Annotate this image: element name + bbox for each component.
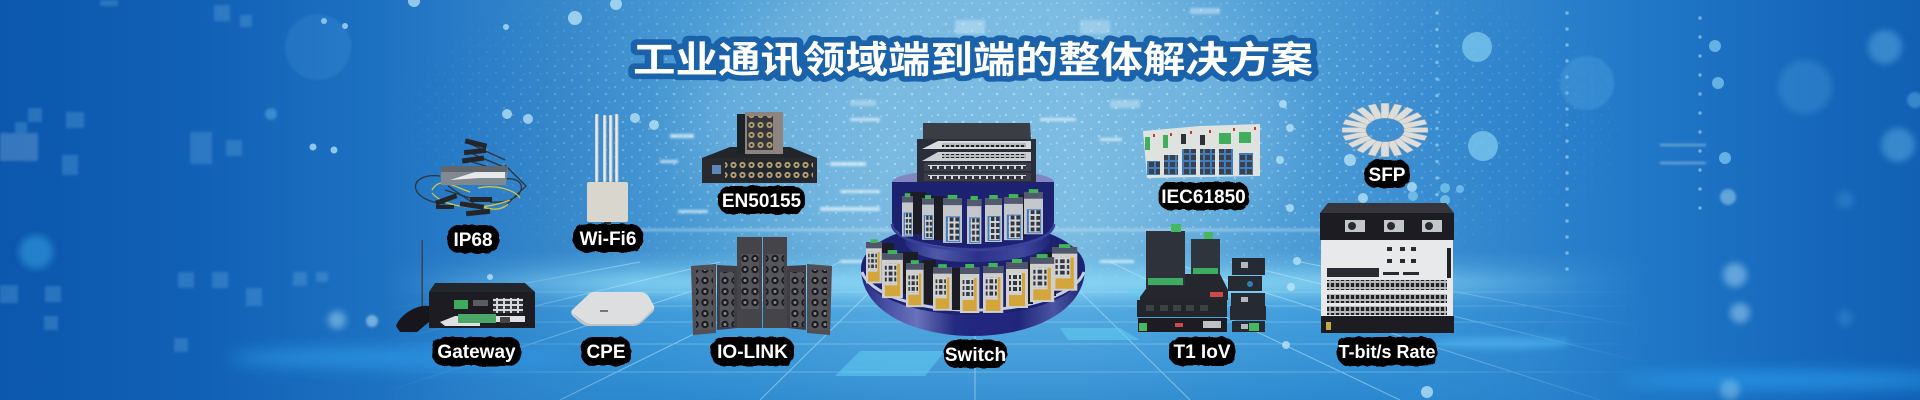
data streaks <box>640 8 1706 263</box>
device: T-bit/s rate chassis <box>1320 203 1454 333</box>
label: IP68 <box>447 225 499 253</box>
floor <box>408 258 1624 400</box>
label: SFP <box>1364 160 1410 188</box>
device: Wi-Fi6 router <box>587 114 628 224</box>
label: Wi-Fi6 <box>573 224 643 252</box>
device: IO-LINK <box>691 237 832 335</box>
rack switches <box>917 123 1036 182</box>
label: T-bit/s Rate <box>1337 337 1437 366</box>
label: IEC61850 <box>1158 182 1249 210</box>
device: SFP ring <box>1342 103 1428 157</box>
label: T1 IoV: T1 IoV <box>1173 342 1231 363</box>
device: IP68 <box>415 138 526 216</box>
label: T-bit/s Rate: T-bit/s Rate <box>1338 342 1436 362</box>
speckle field <box>422 2 1610 270</box>
label: CPE: CPE <box>586 342 626 363</box>
label: CPE <box>581 337 631 366</box>
upper row of switches <box>902 189 1043 244</box>
device: Gateway <box>396 240 535 332</box>
label: Gateway: Gateway <box>437 342 516 363</box>
label: IO-LINK: IO-LINK <box>717 342 788 363</box>
lower disc <box>861 221 1085 336</box>
label: SFP: SFP <box>1369 165 1406 186</box>
device: Switch carousel <box>861 123 1085 336</box>
middle cylinder <box>905 225 1050 262</box>
label: Gateway <box>432 337 521 366</box>
lower row of switches <box>866 239 1077 313</box>
device: IEC61850 <box>1143 124 1260 178</box>
dotted columns <box>1437 13 1700 300</box>
label: T1 IoV <box>1169 337 1235 366</box>
label: EN50155: EN50155 <box>722 191 802 212</box>
label: EN50155 <box>718 186 805 214</box>
upper disc <box>892 169 1054 250</box>
label: Switch: Switch <box>945 345 1006 366</box>
device: CPE <box>571 292 654 326</box>
title: 工业通讯领域端到端的整体解决方案 <box>633 40 1313 81</box>
device: EN50155 <box>702 112 817 183</box>
label: Wi-Fi6: Wi-Fi6 <box>580 229 636 250</box>
bokeh dots <box>310 0 1433 398</box>
device: T1 IoV <box>1137 224 1266 332</box>
label: IEC61850: IEC61850 <box>1161 187 1246 208</box>
label: IP68: IP68 <box>453 230 493 251</box>
label: IO-LINK <box>711 337 794 366</box>
